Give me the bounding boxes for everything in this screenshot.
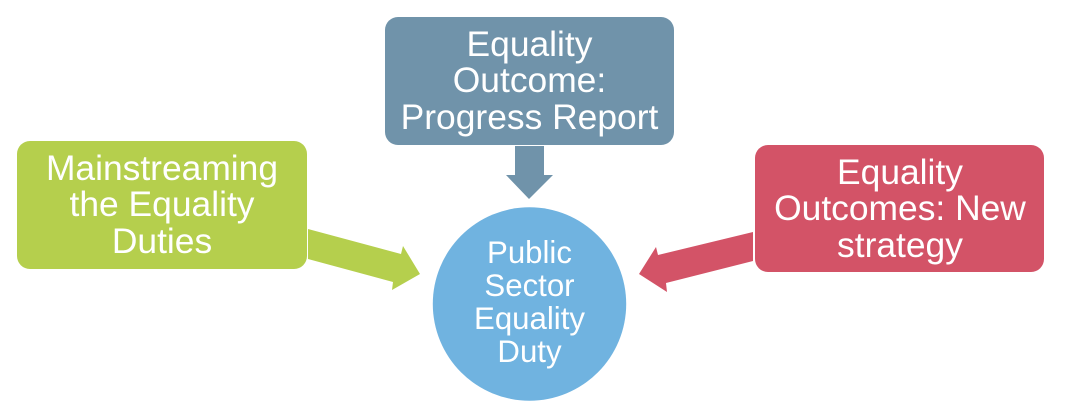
- heading: mainstreaming the equality duties: the Equality: [70, 184, 255, 224]
- heading: equality outcomes new strategy: Outcomes: New: [774, 188, 1026, 228]
- panel: equality outcome progress report: [385, 17, 674, 145]
- panel: mainstreaming the equality duties: [17, 141, 307, 269]
- heading: public sector equality duty: Duty: [497, 334, 562, 369]
- arrow: mainstreaming to centre: [308, 229, 420, 290]
- arrow: new strategy to centre: [639, 232, 753, 292]
- heading: equality outcome progress report: Outcome:: [453, 60, 606, 100]
- panel: equality outcomes new strategy: [755, 145, 1044, 272]
- heading: equality outcome progress report: Progress Report: [401, 97, 659, 137]
- heading: equality outcomes new strategy: strategy: [837, 225, 963, 265]
- heading: public sector equality duty: Equality: [474, 301, 585, 336]
- heading: mainstreaming the equality duties: Duties: [112, 221, 212, 261]
- heading: mainstreaming the equality duties: Mainstreaming: [46, 148, 278, 188]
- heading: equality outcome progress report: Equality: [467, 24, 593, 64]
- panel: public sector equality duty circle: [433, 207, 626, 401]
- heading: public sector equality duty: Sector: [484, 268, 575, 303]
- heading: equality outcomes new strategy: Equality: [837, 152, 963, 192]
- arrow: progress report to centre: [506, 146, 553, 199]
- heading: public sector equality duty: Public: [487, 235, 572, 270]
